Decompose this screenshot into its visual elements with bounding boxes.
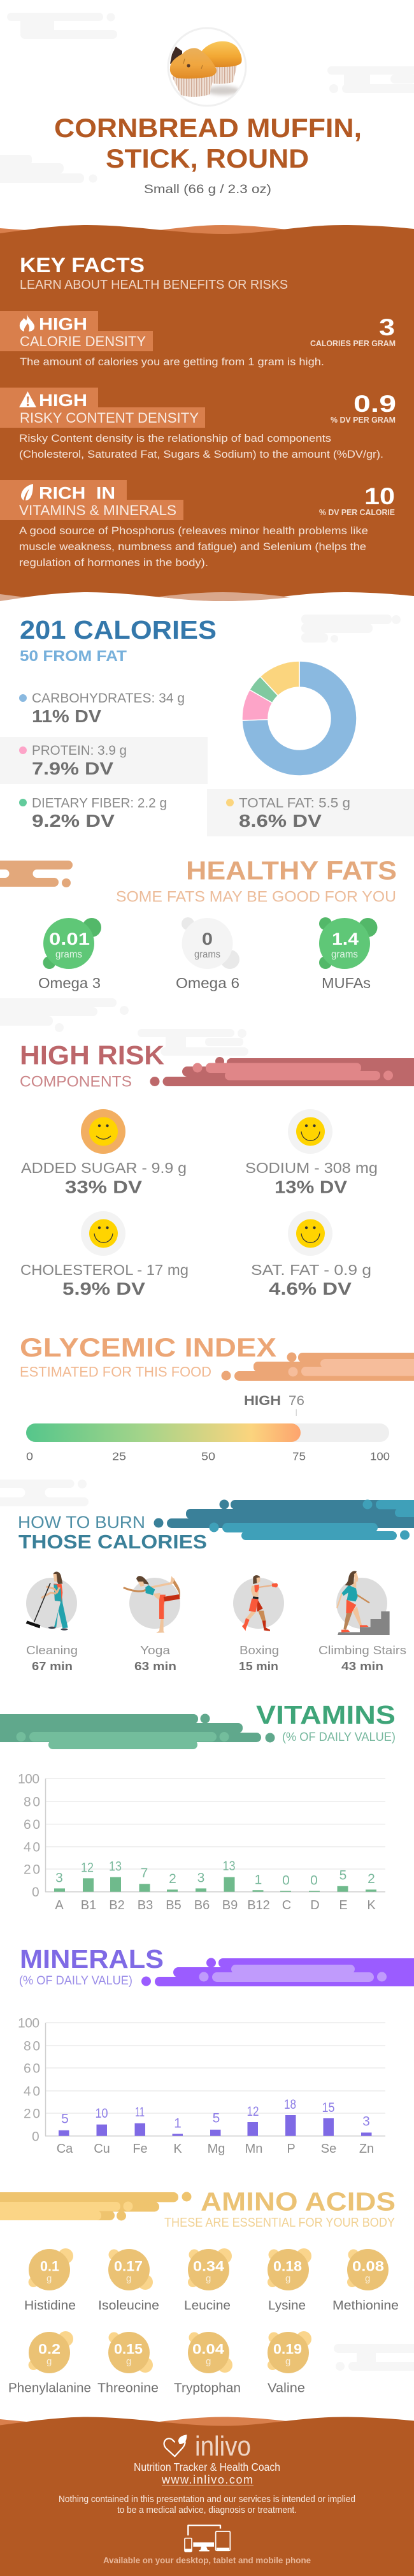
- title: STICK, ROUND: [106, 143, 309, 173]
- bar chart: minerals: K: [173, 2142, 182, 2156]
- amino: tryptophan: [174, 2332, 241, 2396]
- bar chart: vitamins: B9: [222, 1898, 238, 1912]
- stat: omega 6: [176, 917, 239, 991]
- amino: lysine: 0.18: [273, 2258, 302, 2274]
- food photo: muffins: [168, 28, 246, 106]
- amino: phenylalanine: Phenylalanine: [8, 2382, 91, 2396]
- legend: protein: [0, 737, 208, 784]
- amino: lysine: [268, 2248, 311, 2313]
- fact: calorie density: The amount of calories you are getting from 1 gram is high.: [20, 356, 324, 368]
- activity: cleaning: 67 min: [32, 1660, 73, 1673]
- heading: those calories: THOSE CALORIES: [18, 1531, 207, 1553]
- amino: valine: [268, 2331, 311, 2396]
- fact: risky content density: RISKY CONTENT DENSITY: [20, 410, 199, 426]
- amino: threonine: g: [126, 2356, 131, 2367]
- bar chart: vitamins: D: [310, 1898, 320, 1912]
- bar chart: minerals: 80: [24, 2039, 40, 2054]
- amino: methionine: 0.08: [352, 2258, 384, 2274]
- amino: phenylalanine: g: [46, 2356, 52, 2367]
- bar chart: vitamins: B1: [81, 1898, 96, 1912]
- activity: cleaning: [26, 1571, 78, 1673]
- amino: tryptophan: 0.04: [192, 2341, 225, 2357]
- legend: carbohydrates: 11% DV: [32, 706, 101, 726]
- heading: vitamins: VITAMINS: [256, 1700, 396, 1729]
- fact: rich in vitamins and minerals: [0, 480, 395, 569]
- amino: leucine: 0.34: [193, 2258, 225, 2274]
- fact: calorie density: 3: [379, 314, 395, 340]
- heading: healthy fats: HEALTHY FATS: [186, 855, 397, 885]
- bar chart: minerals: 0: [32, 2129, 39, 2144]
- fact: rich in vitamins and minerals: % DV PER CALORIE: [319, 507, 395, 517]
- bar chart: minerals: [18, 2016, 385, 2156]
- activity: boxing: [233, 1575, 284, 1673]
- panel: healthy fats: [0, 855, 397, 991]
- stat: mufas: MUFAs: [322, 975, 371, 991]
- risk: cholesterol: 5.9% DV: [62, 1279, 145, 1299]
- gauge scale: 50: [201, 1450, 215, 1462]
- fact: risky content density: % DV PER GRAM: [331, 415, 396, 425]
- bar chart: vitamins: 5: [339, 1868, 346, 1883]
- bar chart: minerals: Ca: [57, 2142, 73, 2156]
- gauge scale: 100: [370, 1450, 390, 1462]
- bar chart: vitamins: 12: [81, 1860, 94, 1875]
- activity: cleaning: Cleaning: [26, 1643, 78, 1657]
- amino: isoleucine: Isoleucine: [98, 2299, 159, 2313]
- subheading: components: COMPONENTS: [20, 1073, 132, 1090]
- activity: yoga: Yoga: [140, 1643, 171, 1657]
- legend: protein: PROTEIN: 3.9 g: [32, 743, 127, 758]
- donut chart: [242, 661, 357, 776]
- bar chart: vitamins: 2: [368, 1872, 375, 1886]
- logo: inlivo: [164, 2431, 251, 2462]
- amino: valine: g: [285, 2356, 290, 2367]
- legend: dietary fiber: DIETARY FIBER: 2.2 g: [32, 796, 167, 811]
- disclaimer: Nothing contained in this presentation and our services is intended or implied: [59, 2494, 355, 2505]
- panel: key facts: [0, 225, 414, 601]
- panel: footer: [0, 2417, 414, 2576]
- amino: tryptophan: Tryptophan: [174, 2382, 241, 2396]
- bar chart: minerals: Zn: [359, 2142, 374, 2156]
- gauge scale: 75: [292, 1450, 306, 1462]
- heading: key facts: KEY FACTS: [20, 254, 145, 277]
- fact: rich in vitamins and minerals: VITAMINS & MINERALS: [19, 502, 176, 518]
- subheading: (% OF DAILY VALUE): [282, 1731, 396, 1744]
- amino: histidine: Histidine: [24, 2299, 76, 2313]
- subheading: from fat: 50 FROM FAT: [20, 648, 127, 665]
- legend: protein: 7.9% DV: [32, 759, 113, 778]
- activity: climbing stairs: 43 min: [341, 1660, 383, 1673]
- bar chart: vitamins: 3: [197, 1870, 204, 1886]
- bar chart: vitamins: B3: [138, 1898, 153, 1912]
- gauge value: 76: [289, 1394, 304, 1408]
- amino: histidine: 0.1: [40, 2258, 59, 2274]
- risk: cholesterol: [20, 1211, 189, 1299]
- subheading: ESTIMATED FOR THIS FOOD: [20, 1364, 211, 1379]
- subheading: SOME FATS MAY BE GOOD FOR YOU: [116, 889, 396, 905]
- bar chart: vitamins: 80: [24, 1795, 40, 1809]
- bar chart: minerals: 5: [213, 2111, 220, 2125]
- stat: omega 3: [38, 918, 101, 991]
- risk: added sugar: ADDED SUGAR - 9.9 g: [21, 1160, 187, 1176]
- bar chart: vitamins: 100: [18, 1772, 39, 1786]
- bar chart: minerals: 1: [174, 2116, 182, 2130]
- bar chart: minerals: 60: [24, 2062, 40, 2076]
- bar chart: vitamins: 0: [282, 1873, 290, 1888]
- bar chart: vitamins: 13: [109, 1859, 122, 1874]
- bar chart: minerals: 15: [322, 2100, 335, 2115]
- stat: omega 3: 0.01: [49, 929, 90, 949]
- fact: rich in vitamins and minerals: regulation of hormones in the body).: [19, 557, 208, 569]
- icon: flame: [20, 314, 34, 331]
- gauge value: HIGH: [244, 1394, 281, 1408]
- title: CORNBREAD MUFFIN,: [54, 113, 362, 143]
- bar chart: minerals: Mg: [208, 2142, 225, 2156]
- risk: sodium: SODIUM - 308 mg: [245, 1160, 378, 1176]
- gauge scale: 25: [112, 1450, 126, 1462]
- bar chart: minerals: 3: [362, 2114, 370, 2129]
- stat: mufas: grams: [331, 949, 358, 960]
- risk: sodium: 13% DV: [275, 1177, 347, 1197]
- amino: tryptophan: g: [206, 2356, 211, 2367]
- subheading: LEARN ABOUT HEALTH BENEFITS OR RISKS: [20, 278, 288, 292]
- bar chart: vitamins: B6: [194, 1898, 210, 1912]
- bar chart: vitamins: 2: [169, 1872, 176, 1886]
- risk: saturated fat: 4.6% DV: [269, 1279, 352, 1299]
- amino: isoleucine: 0.17: [114, 2258, 143, 2274]
- stat: mufas: 1.4: [332, 929, 359, 949]
- bar chart: vitamins: 20: [24, 1863, 40, 1877]
- tagline: Nutrition Tracker & Health Coach: [134, 2461, 280, 2473]
- bar chart: vitamins: K: [367, 1898, 376, 1912]
- heading: amino acids: AMINO ACIDS: [201, 2187, 396, 2216]
- disclaimer: to be a medical advice, diagnosis or treatment.: [117, 2505, 297, 2515]
- icon: leaf: [21, 484, 33, 500]
- panel: calories: [0, 615, 414, 836]
- amino: leucine: [184, 2248, 232, 2313]
- bar chart: vitamins: A: [55, 1898, 64, 1912]
- bar chart: minerals: Cu: [94, 2142, 110, 2156]
- stat: omega 6: 0: [202, 929, 213, 949]
- panel: glycemic index: [20, 1332, 414, 1462]
- heading: glycemic index: GLYCEMIC INDEX: [20, 1332, 276, 1362]
- bar chart: vitamins: 60: [24, 1817, 40, 1832]
- legend: dietary fiber: [19, 796, 167, 831]
- logo: inlivo: inlivo: [195, 2431, 251, 2462]
- bar chart: vitamins: [18, 1772, 385, 1912]
- website link: www.inlivo.com: [161, 2473, 253, 2486]
- activity: yoga: [124, 1576, 180, 1673]
- legend: carbohydrates: [19, 691, 185, 726]
- amino: methionine: [332, 2249, 399, 2313]
- stat: omega 3: Omega 3: [38, 975, 101, 991]
- bar chart: minerals: 12: [247, 2104, 259, 2119]
- amino: lysine: Lysine: [268, 2299, 306, 2313]
- bar chart: vitamins: 3: [55, 1870, 63, 1886]
- stat: omega 3: grams: [55, 949, 82, 960]
- fact: risky content density: HIGH: [39, 391, 87, 410]
- bar chart: minerals: 100: [18, 2016, 39, 2031]
- panel: how to burn those calories: [0, 1480, 414, 1673]
- stat: omega 6: Omega 6: [176, 975, 239, 991]
- risk: sodium: [245, 1109, 378, 1197]
- amino: phenylalanine: [8, 2331, 91, 2396]
- legend: total fat: TOTAL FAT: 5.5 g: [239, 796, 350, 811]
- bar chart: minerals: 20: [24, 2107, 40, 2121]
- activity: boxing: 15 min: [239, 1660, 278, 1673]
- bar chart: vitamins: E: [339, 1898, 348, 1912]
- amino: histidine: [24, 2248, 76, 2313]
- gauge scale: [26, 1450, 390, 1462]
- bar chart: vitamins: 7: [141, 1866, 148, 1881]
- stat: mufas: [319, 917, 377, 991]
- icon: warning: [19, 391, 36, 407]
- fact: rich in vitamins and minerals: 10: [364, 483, 395, 509]
- activity: climbing stairs: Climbing Stairs: [318, 1643, 406, 1657]
- bar chart: minerals: 18: [284, 2097, 296, 2112]
- bar chart: minerals: Mn: [245, 2142, 262, 2156]
- bar chart: vitamins: 0: [32, 1885, 39, 1900]
- heading: calories: 201 CALORIES: [20, 615, 217, 644]
- amino: phenylalanine: 0.2: [38, 2341, 61, 2357]
- amino: valine: Valine: [268, 2382, 305, 2396]
- bar chart: vitamins: 0: [310, 1873, 318, 1888]
- activity: climbing stairs: [318, 1571, 406, 1673]
- bar chart: vitamins: 40: [24, 1840, 40, 1855]
- bar chart: minerals: 11: [135, 2105, 145, 2120]
- amino: isoleucine: [98, 2249, 159, 2313]
- bar chart: minerals: P: [287, 2142, 296, 2156]
- panel: high risk components: [0, 998, 414, 1299]
- fact: risky content density: [0, 388, 396, 460]
- legend: dietary fiber: 9.2% DV: [32, 811, 115, 831]
- amino: threonine: [97, 2332, 159, 2396]
- legend: total fat: [207, 789, 414, 836]
- risk: added sugar: [21, 1109, 187, 1197]
- panel: minerals: [18, 1944, 414, 2156]
- serving size: Small (66 g / 2.3 oz): [144, 182, 271, 196]
- gauge value: [244, 1394, 304, 1416]
- title: [54, 113, 362, 173]
- bar chart: minerals: 5: [61, 2111, 69, 2127]
- fact: calorie density: HIGH: [39, 315, 87, 334]
- heading: minerals: MINERALS: [20, 1944, 164, 1974]
- fact: risky content density: 0.9: [353, 391, 396, 417]
- disclaimer: [59, 2494, 355, 2515]
- amino: histidine: g: [46, 2273, 52, 2284]
- bar chart: minerals: Se: [321, 2142, 336, 2156]
- risk: saturated fat: [251, 1211, 371, 1299]
- fact: rich in vitamins and minerals: A good source of Phosphorus (releaves minor health problems like: [19, 525, 368, 537]
- bar chart: minerals: 40: [24, 2085, 40, 2099]
- fact: rich in vitamins and minerals: RICH IN: [39, 483, 115, 502]
- risk: added sugar: 33% DV: [65, 1177, 142, 1197]
- legend: total fat: 8.6% DV: [239, 811, 322, 831]
- bar chart: minerals: 10: [96, 2106, 108, 2121]
- fact: calorie density: [0, 311, 396, 368]
- amino: threonine: 0.15: [114, 2341, 143, 2357]
- amino: leucine: Leucine: [184, 2299, 231, 2313]
- risk: cholesterol: CHOLESTEROL - 17 mg: [20, 1262, 189, 1278]
- heading: high risk: HIGH RISK: [20, 1040, 164, 1070]
- activity: boxing: Boxing: [239, 1643, 279, 1657]
- gauge bar: [26, 1423, 389, 1442]
- bar chart: vitamins: C: [282, 1898, 291, 1912]
- bar chart: vitamins: B2: [109, 1898, 125, 1912]
- amino: methionine: g: [365, 2273, 370, 2284]
- gauge scale: 0: [26, 1450, 33, 1462]
- subheading: (% OF DAILY VALUE): [19, 1974, 132, 1988]
- stat: omega 6: grams: [194, 949, 220, 960]
- amino: leucine: g: [206, 2273, 211, 2284]
- fact: risky content density: Risky Content density is the relationship of bad components: [19, 433, 331, 444]
- activity: yoga: 63 min: [134, 1660, 176, 1673]
- bar chart: minerals: Fe: [132, 2142, 148, 2156]
- bar chart: vitamins: B12: [247, 1898, 270, 1912]
- header panel: [0, 13, 414, 196]
- fact: calorie density: CALORIES PER GRAM: [310, 338, 396, 348]
- fact: rich in vitamins and minerals: muscle weakness, numbness and fatigue) and Selenium (helps the: [19, 541, 366, 553]
- legend: carbohydrates: CARBOHYDRATES: 34 g: [32, 691, 185, 706]
- bar chart: vitamins: 13: [223, 1859, 236, 1874]
- icon: devices: [185, 2526, 230, 2552]
- panel: vitamins: [0, 1700, 396, 1912]
- amino: isoleucine: g: [126, 2273, 131, 2284]
- amino: valine: 0.19: [273, 2341, 302, 2357]
- amino: methionine: Methionine: [332, 2299, 399, 2313]
- risk: saturated fat: SAT. FAT - 0.9 g: [251, 1262, 371, 1278]
- bar chart: vitamins: 1: [255, 1873, 262, 1887]
- panel: amino acids: [0, 2187, 414, 2396]
- fact: risky content density: (Cholesterol, Saturated Fat, Sugars & Sodium) to the amount (%DV/gr).: [19, 449, 383, 460]
- availability note: Available on your desktop, tablet and mobile phone: [103, 2555, 311, 2565]
- fact: calorie density: CALORIE DENSITY: [20, 333, 146, 349]
- amino: threonine: Threonine: [97, 2382, 159, 2396]
- bar chart: vitamins: B5: [166, 1898, 182, 1912]
- amino: lysine: g: [285, 2273, 290, 2284]
- heading: how to burn: HOW TO BURN: [18, 1513, 145, 1532]
